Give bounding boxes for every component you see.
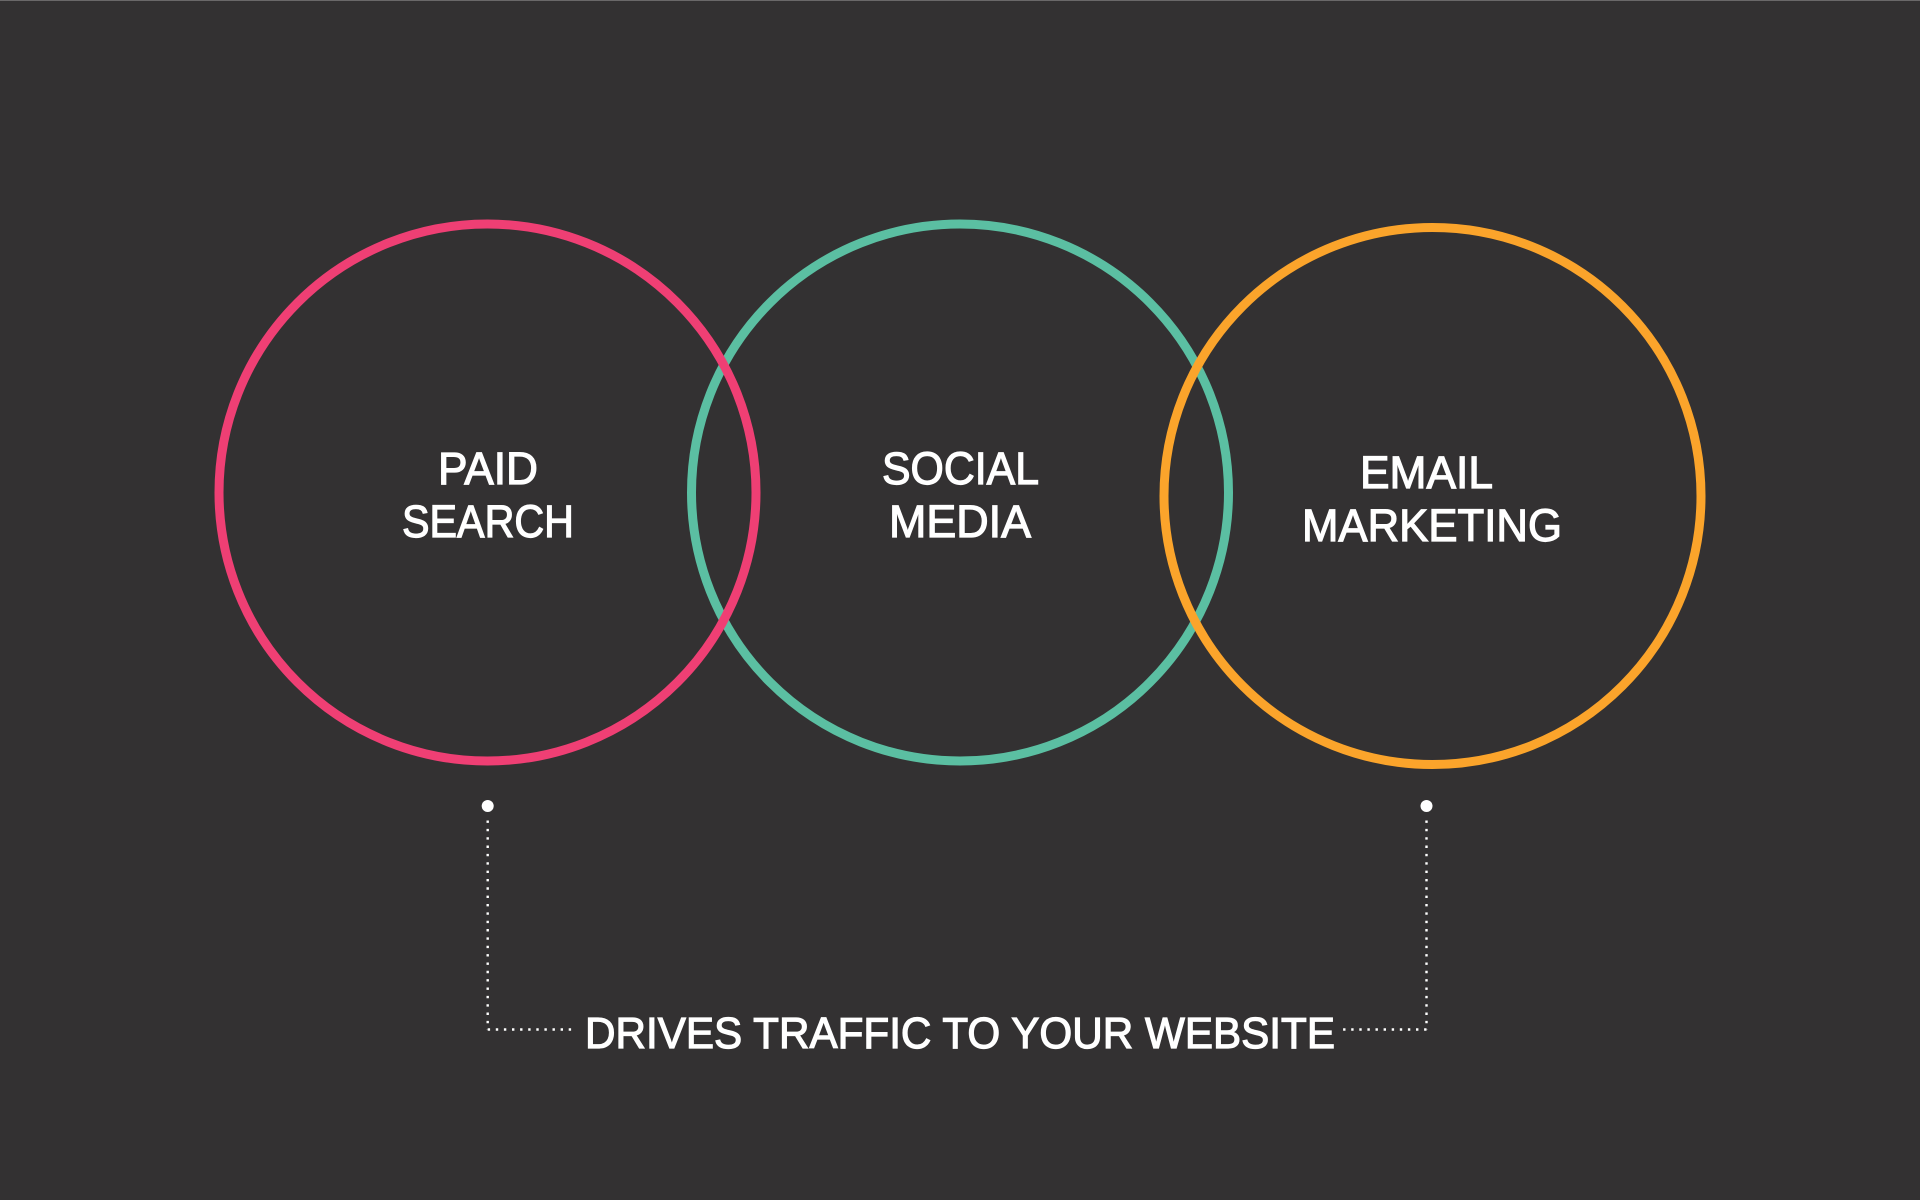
- label: email marketing: MARKETING: [1302, 500, 1562, 551]
- label: paid search: SEARCH: [402, 496, 574, 547]
- circle: social media (green ring): [692, 224, 1228, 761]
- label: email marketing: EMAIL: [1360, 447, 1493, 498]
- connector: left dot and dotted line: [482, 800, 571, 1030]
- label: paid search: [402, 443, 574, 547]
- circle: email marketing (orange ring): [1164, 228, 1701, 764]
- connector: right dot and dotted line: [1343, 800, 1432, 1030]
- label: email marketing: [1302, 447, 1562, 551]
- label: social media: SOCIAL: [882, 443, 1039, 494]
- circle: paid search (pink ring): [219, 224, 756, 761]
- caption: drives traffic to your website: DRIVES TRAFFIC TO YOUR WEBSITE: [585, 1009, 1335, 1058]
- label: social media: MEDIA: [889, 496, 1031, 547]
- label: social media: [882, 443, 1039, 547]
- label: paid search: PAID: [438, 443, 538, 494]
